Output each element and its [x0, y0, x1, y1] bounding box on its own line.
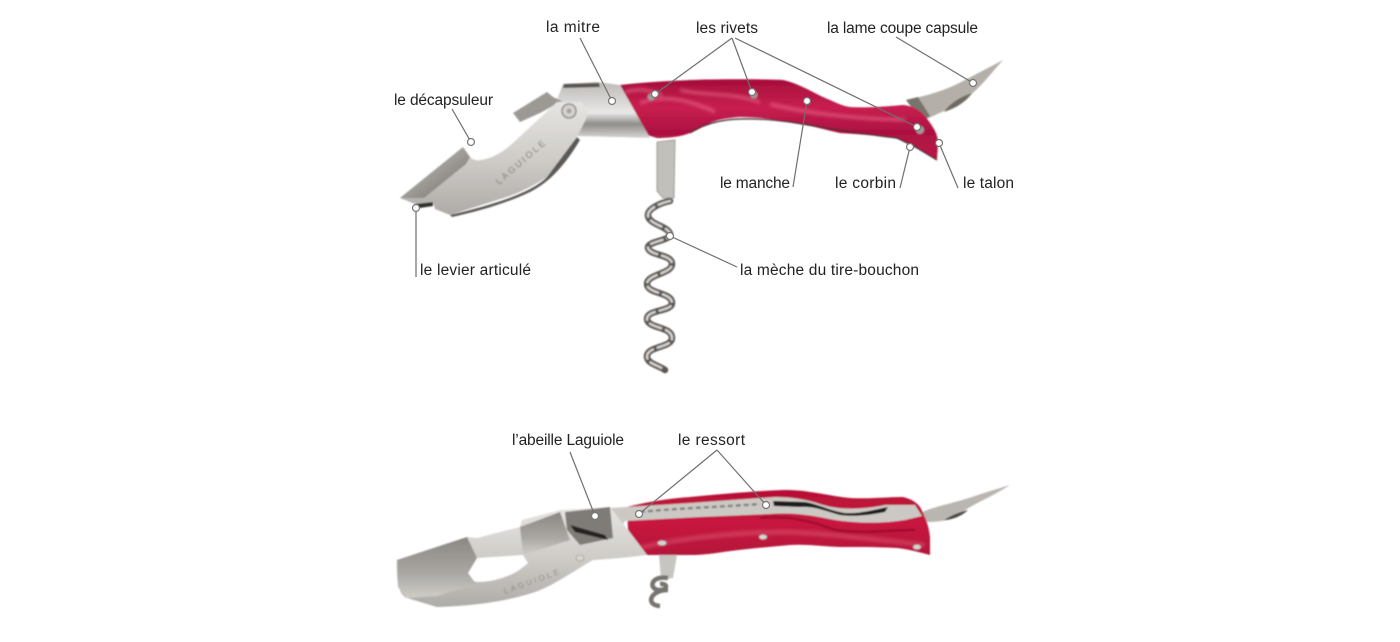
bottle opener lever — [513, 92, 562, 122]
label: la mèche du tire-bouchon: la mèche du tire-bouchon — [740, 262, 919, 279]
label: la mitre: la mitre — [546, 19, 600, 36]
handle — [620, 79, 938, 160]
illustration: corkscrew open view — [397, 485, 1010, 607]
label: le talon: le talon — [963, 175, 1014, 192]
label: le ressort: le ressort — [678, 432, 746, 449]
illustration: corkscrew side view — [400, 60, 1003, 370]
rivet shadows — [648, 92, 924, 134]
label: la lame coupe capsule: la lame coupe capsule — [827, 20, 978, 37]
blade — [920, 485, 1010, 522]
bottle opener lever — [397, 507, 647, 607]
label: l'abeille Laguiole: l’abeille Laguiole — [512, 432, 624, 449]
spring band — [610, 497, 922, 530]
corkscrew worm — [647, 201, 672, 370]
engraved brand, mirrored position: LAGUIOLE — [503, 568, 560, 596]
label: le manche: le manche — [720, 175, 790, 192]
rivets — [576, 534, 921, 561]
corkscrew shank — [657, 140, 675, 198]
label: le levier articulé: le levier articulé — [420, 262, 531, 279]
mitre — [557, 82, 650, 138]
blade — [906, 60, 1003, 121]
label: les rivets: les rivets — [696, 20, 758, 37]
label: le corbin: le corbin — [835, 175, 896, 192]
callout dots — [412, 80, 976, 520]
label: le décapsuleur: le décapsuleur — [394, 92, 493, 109]
shank and worm stub — [659, 555, 677, 580]
engraved brand: LAGUIOLE — [494, 138, 547, 187]
handle — [627, 490, 930, 555]
leader lines — [416, 37, 973, 516]
